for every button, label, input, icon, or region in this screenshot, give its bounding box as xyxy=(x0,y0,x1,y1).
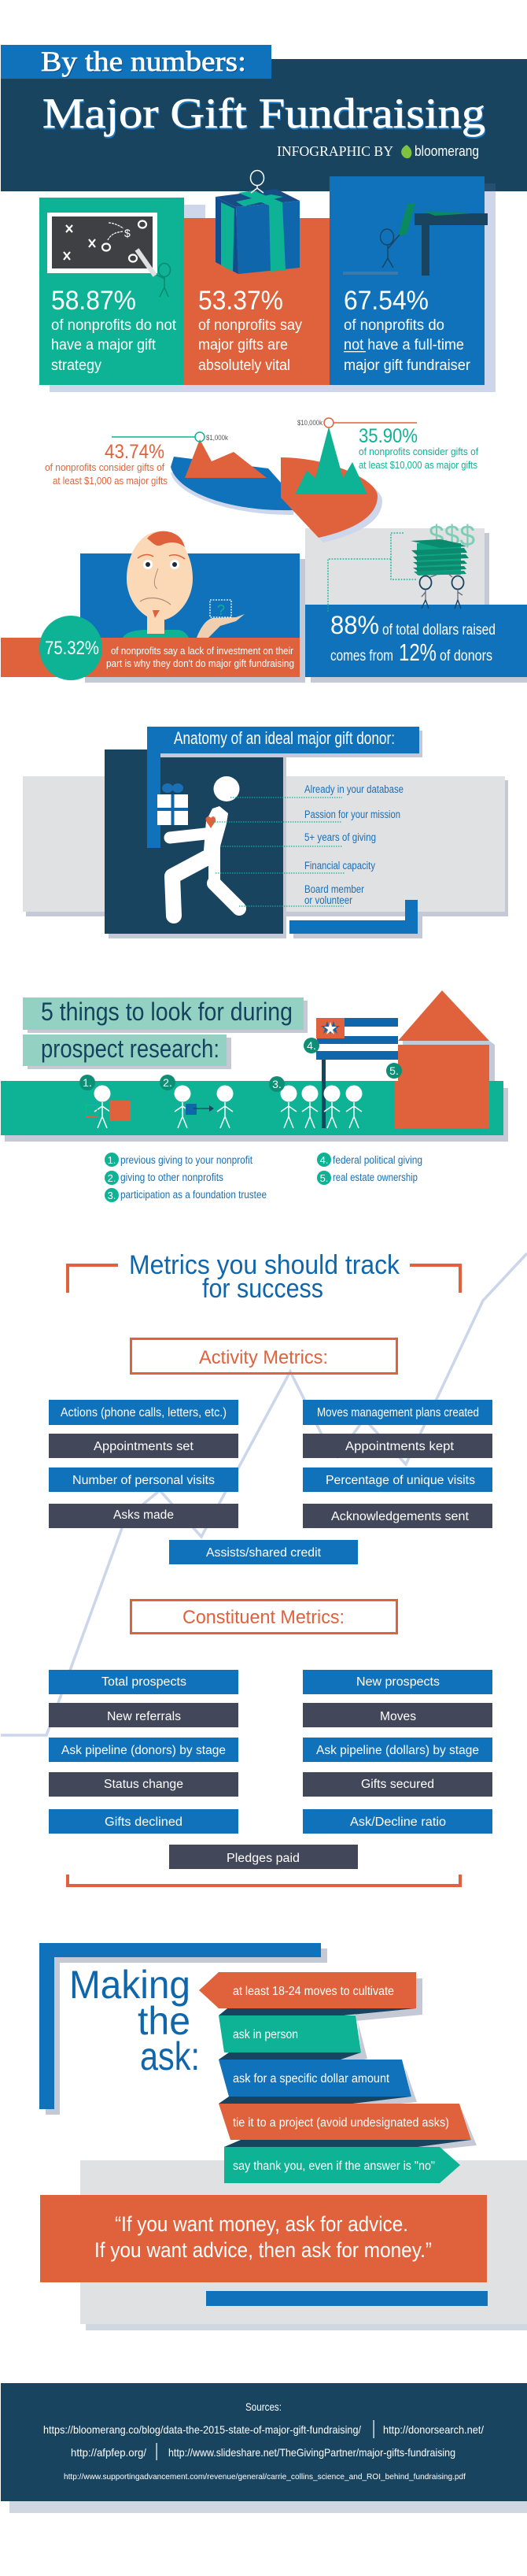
legend: prospect research: giving to other nonprofits xyxy=(120,1171,223,1183)
step 5 xyxy=(224,2147,460,2183)
illustration: confused man xyxy=(123,531,245,638)
numbered markers: 2. xyxy=(163,1076,172,1089)
activity metric cells: Appointments kept xyxy=(345,1440,455,1453)
activity metric cells xyxy=(49,1400,492,1564)
stat description: of nonprofits do not xyxy=(51,317,177,334)
chart: major gift thresholds pie xyxy=(112,418,417,542)
dotted connector over panel xyxy=(327,605,329,613)
panel: 88% of dollars xyxy=(305,520,527,683)
dotted connectors xyxy=(328,533,416,605)
stat description xyxy=(198,317,302,374)
activity metric cells: Asks made xyxy=(113,1508,174,1522)
icon: flag xyxy=(316,1018,398,1128)
source links: http://afpfep.org/ xyxy=(71,2446,146,2459)
activity metric cells: Assists/shared credit xyxy=(206,1546,322,1560)
stat description xyxy=(51,317,177,374)
stat: 35.90% xyxy=(359,425,478,471)
accent bar xyxy=(206,2291,488,2306)
heading block: prospect research: xyxy=(41,1034,219,1063)
activity metric cells: Actions (phone calls, letters, etc.) xyxy=(61,1406,227,1419)
panel: major gifts vital xyxy=(184,170,330,385)
stat description: strategy xyxy=(51,357,101,374)
constituent metric cells: Ask/Decline ratio xyxy=(350,1815,446,1829)
panel: anatomy of donor: Anatomy of an ideal major gift donor: xyxy=(174,728,395,748)
heading: activity metrics: Activity Metrics: xyxy=(199,1347,328,1368)
stat description: major gift fundraiser xyxy=(344,357,471,374)
step 3 xyxy=(219,2060,411,2097)
step 2 xyxy=(219,2015,361,2052)
fold xyxy=(224,2140,471,2147)
callout: quote: If you want advice, then ask for money.” xyxy=(94,2238,432,2262)
source links: http://www.slideshare.net/TheGivingPartner/major-gifts-fundraising xyxy=(168,2446,455,2459)
stat: 12% of donors: comes from xyxy=(330,648,393,664)
stat description: have a major gift xyxy=(51,337,157,353)
icon: teal mountain xyxy=(295,427,367,494)
step 4: tie it to a project (avoid undesignated asks) xyxy=(233,2116,449,2130)
fold xyxy=(219,2008,416,2015)
stat: 35.90%: 35.90% xyxy=(359,425,418,447)
title: Major Gift Fundraising xyxy=(42,90,485,137)
constituent metric cells: Moves xyxy=(380,1710,416,1723)
legend: prospect research: 5. xyxy=(320,1172,328,1184)
icon: blue box with arrow xyxy=(186,1104,214,1115)
stat description: absolutely vital xyxy=(198,357,290,374)
stat description: of nonprofits say a lack of investment on their xyxy=(111,645,294,657)
footer: sources xyxy=(1,2383,527,2513)
legend: prospect research: federal political giving xyxy=(333,1154,422,1166)
constituent metric cells: New referrals xyxy=(107,1710,181,1723)
constituent metric cells: Total prospects xyxy=(101,1675,186,1689)
stat: 35.90%: at least $10,000 as major gifts xyxy=(359,460,477,471)
donor trait labels: 5+ years of giving xyxy=(304,831,376,843)
callout: quote: “If you want money, ask for advice. xyxy=(115,2212,408,2236)
header banner xyxy=(1,45,527,191)
icon: stick figures lifting xyxy=(420,573,464,609)
icon: table xyxy=(415,211,488,276)
source links: http://www.supportingadvancement.com/revenue/general/carrie_collins_science_and_ROI_behind_fundraising.pdf xyxy=(64,2472,466,2482)
constituent metric cells xyxy=(49,1670,492,1869)
stat text: of donors: of donors xyxy=(440,648,492,664)
heading block: 5 things to look for during xyxy=(41,997,293,1026)
grey quote backdrop xyxy=(80,2160,527,2330)
heading: activity metrics xyxy=(131,1338,396,1373)
source links xyxy=(43,2420,484,2482)
label: $10,000k: $10,000k xyxy=(297,419,322,427)
legend: prospect research: 2. xyxy=(108,1172,116,1184)
ribbon shadows xyxy=(341,1978,477,2152)
constituent metric cells: Pledges paid xyxy=(227,1852,300,1865)
badge: 75.32% xyxy=(39,616,102,680)
constituent metric cells: Ask pipeline (donors) by stage xyxy=(61,1744,226,1757)
heading: making the ask xyxy=(69,1963,200,2078)
source links: https://bloomerang.co/blog/data-the-2015-state-of-major-gift-fundraising/ xyxy=(43,2423,361,2436)
bottom bracket xyxy=(66,1875,462,1887)
step 5: say thank you, even if the answer is "no" xyxy=(233,2160,435,2173)
constituent metric cells: Gifts declined xyxy=(105,1815,182,1829)
icon: gift box xyxy=(216,189,300,274)
stat figure: 12%: 12% xyxy=(399,638,437,666)
stick figures xyxy=(94,1085,362,1128)
dotted leader lines xyxy=(212,798,345,906)
stat: 43.74%: at least $1,000 as major gifts xyxy=(53,476,168,487)
stat description: of nonprofits say xyxy=(198,317,302,334)
numbered markers xyxy=(79,1038,402,1092)
fold xyxy=(219,2052,361,2060)
step 2: ask in person xyxy=(233,2028,298,2041)
stat description: of nonprofits do xyxy=(344,317,444,334)
corner bracket xyxy=(39,1943,327,2115)
heading: constituent metrics: Constituent Metrics: xyxy=(182,1607,345,1628)
panel: lack of investment: 75.32% xyxy=(45,638,99,659)
stat: 43.74%: 43.74% xyxy=(105,441,164,463)
legend: prospect research: 4. xyxy=(320,1154,328,1166)
numbered markers: 5. xyxy=(389,1064,399,1077)
donor trait labels: Board member xyxy=(304,883,364,895)
icon: stick figure with paper xyxy=(343,203,415,275)
icon: chalkboard: $ xyxy=(124,227,131,239)
constituent metric cells: New prospects xyxy=(356,1675,440,1689)
donor trait labels: Financial capacity xyxy=(304,860,375,872)
constituent metric cells: Gifts secured xyxy=(361,1778,434,1791)
illustration: confused man: ? xyxy=(217,602,225,618)
callout: quote xyxy=(40,2195,487,2282)
heading: making the ask: the xyxy=(138,1999,190,2043)
activity metric cells: Acknowledgements sent xyxy=(331,1510,470,1523)
legend: prospect research: 1. xyxy=(108,1154,116,1166)
heading block xyxy=(147,727,419,848)
step 3: ask for a specific dollar amount xyxy=(233,2072,390,2086)
stat description xyxy=(344,317,471,374)
legend: prospect research: 3. xyxy=(108,1190,116,1201)
heading block xyxy=(23,997,308,1069)
background trend line xyxy=(1,1253,527,1735)
icon: chalkboard xyxy=(47,213,157,276)
step 4 xyxy=(219,2104,471,2140)
corner bracket xyxy=(289,900,418,934)
stat: 43.74%: of nonprofits consider gifts of xyxy=(45,462,164,473)
activity metric cells: Percentage of unique visits xyxy=(326,1474,475,1487)
stat text: of total dollars raised: of total dollars raised xyxy=(382,622,496,638)
stat: 43.74% xyxy=(45,441,168,487)
icon: orange boxes xyxy=(87,1101,131,1121)
stat: 35.90%: of nonprofits consider gifts of xyxy=(359,446,478,457)
stat description: not have a full-time xyxy=(344,337,464,353)
constituent metric cells: Status change xyxy=(104,1778,183,1791)
fold xyxy=(219,2097,411,2104)
donor trait labels: or volunteer xyxy=(304,894,352,906)
icon: stick figure on gift xyxy=(250,170,264,193)
numbered markers: 1. xyxy=(83,1076,92,1089)
label: $1,000k: $1,000k xyxy=(206,434,228,442)
panel: no major gift strategy xyxy=(39,198,184,385)
stat: 67.54%: 67.54% xyxy=(344,286,429,316)
stat: 58.87%: 58.87% xyxy=(51,286,136,316)
panel: no full-time fundraiser xyxy=(330,176,488,385)
icon: question box xyxy=(210,600,231,617)
stat: 88% of total dollars: 88% xyxy=(330,611,379,639)
heading: by the numbers: By the numbers: xyxy=(41,46,246,77)
icon: gift xyxy=(157,783,188,825)
donor trait labels: Passion for your mission xyxy=(304,809,400,820)
icon: heart xyxy=(206,816,216,828)
sources heading: Sources: xyxy=(245,2401,282,2413)
step 1: at least 18-24 moves to cultivate xyxy=(233,1985,394,1998)
legend: prospect research: real estate ownership xyxy=(333,1171,418,1183)
icon: house xyxy=(395,990,495,1128)
icon: stack of money xyxy=(411,539,469,576)
step 1 xyxy=(199,1972,416,2008)
activity metric cells: Moves management plans created xyxy=(317,1406,479,1419)
activity metric cells: Appointments set xyxy=(94,1440,194,1453)
source links: http://donorsearch.net/ xyxy=(383,2423,484,2436)
panel: lack of investment xyxy=(1,531,305,683)
numbered markers: 4. xyxy=(307,1039,316,1052)
donor trait labels xyxy=(304,783,404,906)
panel: anatomy of donor xyxy=(23,727,508,938)
heading: making the ask: ask: xyxy=(140,2034,200,2078)
panel: making the ask xyxy=(39,1943,477,2183)
legend: prospect research: previous giving to your nonprofit xyxy=(120,1154,252,1166)
heading: metrics: Metrics you should track xyxy=(129,1250,400,1280)
icon: orange mountain xyxy=(185,439,267,478)
stat description: major gifts are xyxy=(198,337,288,353)
constituent metric cells: Ask pipeline (dollars) by stage xyxy=(316,1744,479,1757)
top brackets xyxy=(66,1264,462,1293)
logo text: bloomerang xyxy=(415,143,479,159)
donor trait labels: Already in your database xyxy=(304,783,404,795)
heading: metrics xyxy=(129,1250,400,1304)
icon: bloomerang leaf xyxy=(401,145,411,158)
icon: dollar signs: $$$ xyxy=(429,520,475,552)
activity metric cells: Number of personal visits xyxy=(72,1474,215,1487)
stat: 53.37%: 53.37% xyxy=(198,286,283,316)
credit line: INFOGRAPHIC BY xyxy=(277,143,393,159)
numbered markers: 3. xyxy=(272,1078,282,1090)
panel: lack of investment: part is why they don't do major gift fundraising xyxy=(106,657,294,669)
icon: stick figure with chalk xyxy=(157,263,170,297)
heading: constituent metrics xyxy=(131,1600,396,1633)
panel shadows xyxy=(50,183,496,392)
illustration: donor figure xyxy=(157,776,239,916)
legend: prospect research: participation as a foundation trustee xyxy=(120,1189,267,1201)
heading: metrics: for success xyxy=(202,1274,323,1304)
panel: prospect research xyxy=(1,990,508,1142)
heading: making the ask: Making xyxy=(69,1963,190,2007)
legend: prospect research xyxy=(105,1153,422,1202)
